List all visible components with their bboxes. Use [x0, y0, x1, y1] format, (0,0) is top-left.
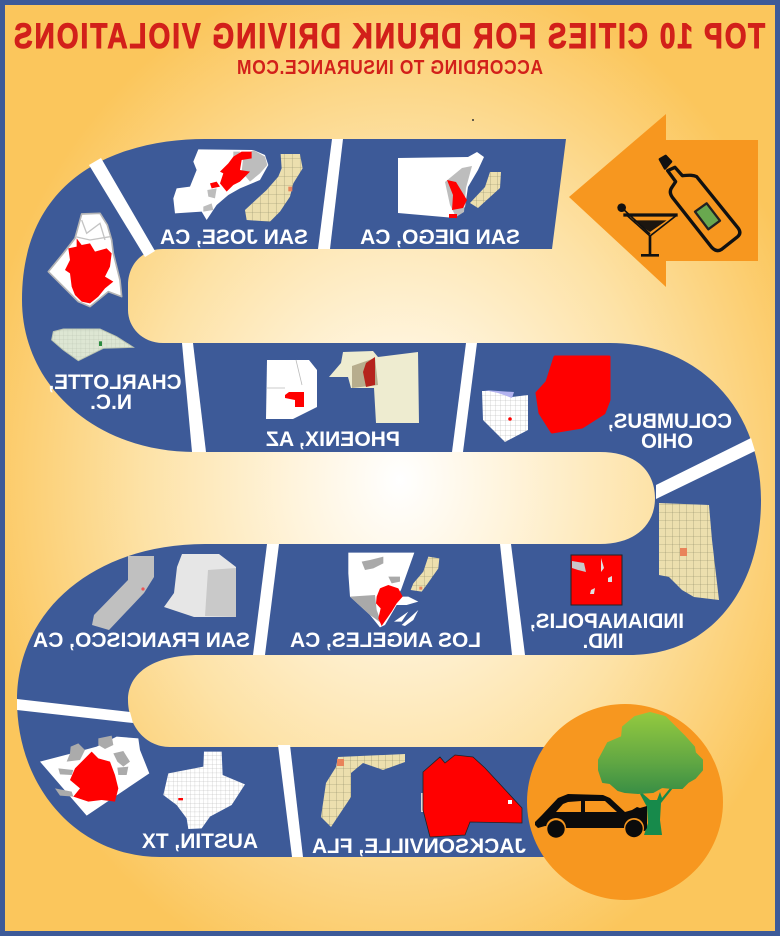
California locator — [411, 557, 439, 592]
panel: Phoenix — [266, 351, 419, 451]
Marion county map — [571, 555, 622, 605]
Florida locator — [321, 754, 405, 827]
icon: crashed car — [535, 794, 647, 838]
panel: San Francisco — [33, 554, 250, 652]
Texas locator — [163, 752, 245, 829]
San Diego county map — [398, 152, 484, 218]
city label: SAN FRANCISCO, CA — [33, 629, 250, 652]
city label: INDIANAPOLIS, — [530, 610, 684, 633]
stray dot — [472, 119, 474, 121]
city label — [608, 410, 732, 453]
crash scene circle — [527, 704, 723, 900]
city label: SAN JOSE, CA — [160, 226, 308, 249]
panel: Columbus — [482, 357, 732, 453]
panel: Charlotte — [48, 213, 181, 414]
city label: SAN DIEGO, CA — [360, 226, 520, 249]
icon: tree — [599, 713, 702, 835]
orange circle — [527, 704, 723, 900]
panel: Indianapolis — [530, 503, 719, 653]
city label: LOS ANGELES, CA — [290, 629, 481, 652]
icon: bottle — [660, 156, 740, 251]
panel: San Jose — [160, 149, 308, 249]
road dividers — [17, 139, 755, 857]
city label: OHIO — [641, 430, 693, 453]
title: TOP 10 CITIES FOR DRUNK DRIVING VIOLATIONS — [14, 16, 765, 56]
city label: CHARLOTTE, — [48, 371, 182, 394]
Santa Clara county map — [173, 149, 268, 220]
city label: AUSTIN, TX — [142, 830, 258, 853]
orange arrow — [569, 114, 758, 287]
Indiana locator — [659, 503, 719, 600]
city label: COLUMBUS, — [608, 410, 732, 433]
Arizona locator — [266, 360, 317, 419]
Duval county map — [421, 793, 428, 812]
panel: Jacksonville — [312, 754, 526, 858]
Ohio locator — [482, 391, 528, 442]
Travis county map — [40, 736, 149, 816]
panel: San Diego — [360, 152, 520, 249]
San Francisco district map — [164, 554, 236, 617]
winding road — [17, 139, 761, 857]
Mecklenburg county map — [48, 213, 122, 307]
panel: Los Angeles — [290, 553, 481, 652]
California locator — [245, 154, 303, 222]
Maricopa county map — [329, 351, 419, 423]
start arrow with drinks — [569, 114, 758, 287]
subtitle: ACCORDING TO INSURANCE.COM — [237, 57, 543, 79]
city label — [48, 371, 182, 414]
panel: Austin — [40, 736, 258, 853]
city label: PHOENIX, AZ — [266, 428, 400, 451]
city label — [530, 610, 684, 653]
California locator — [470, 172, 501, 208]
California locator — [92, 556, 154, 630]
city label: IND. — [582, 630, 624, 653]
city label: N.C. — [90, 391, 132, 414]
icon: martini glass — [617, 203, 678, 255]
North Carolina locator — [52, 329, 133, 361]
LA county map — [348, 553, 418, 627]
Franklin county red map — [537, 357, 609, 432]
city label: JACKSONVILLE, FLA — [312, 835, 526, 858]
